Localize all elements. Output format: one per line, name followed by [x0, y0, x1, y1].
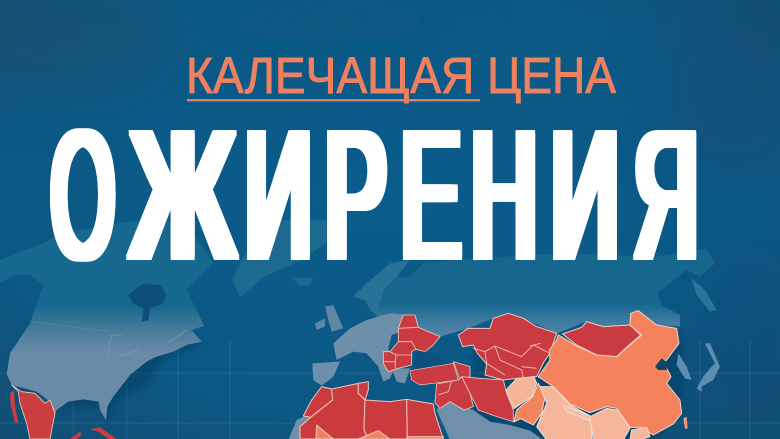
subtitle: КАЛЕЧАЩАЯ ЦЕНА: КАЛЕЧАЩАЯ ЦЕНА [186, 47, 616, 104]
turkey [410, 363, 458, 385]
title: ОЖИРЕНИЯ: Н [471, 92, 537, 297]
title: ОЖИРЕНИЯ: Я [634, 92, 698, 297]
land: greenland and iceland [232, 220, 337, 297]
countries: balkans, eastern europe and turkey [383, 313, 557, 422]
hudson bay [128, 283, 167, 322]
title: ОЖИРЕНИЯ: О [51, 92, 114, 297]
map graticule [0, 340, 780, 439]
title: ОЖИРЕНИЯ: Р [325, 92, 387, 297]
caucasus [453, 362, 470, 380]
great lakes [107, 330, 187, 357]
land: mexico and caribbean [10, 385, 117, 439]
land: arabia and west sahara [288, 368, 543, 439]
land: north america [0, 220, 213, 420]
land: russia and north asia [377, 248, 720, 392]
levant and iraq [435, 377, 473, 410]
us canada border [33, 322, 110, 332]
korea and japan [677, 343, 720, 392]
countries: mongolia [563, 322, 641, 357]
central asia [458, 313, 557, 380]
black sea [413, 352, 449, 368]
land: europe [312, 260, 410, 386]
countries: south asia [506, 377, 650, 439]
title: ОЖИРЕНИЯ: Ж [131, 92, 234, 297]
countries: china [538, 311, 688, 435]
title: ОЖИРЕНИЯ: И [551, 92, 619, 297]
subtitle underline [187, 99, 480, 101]
map shadows [10, 296, 683, 439]
title: ОЖИРЕНИЯ: И [245, 92, 312, 297]
countries: north africa and middle east [300, 382, 443, 439]
iran [462, 377, 513, 422]
far east land [692, 278, 717, 312]
title: ОЖИРЕНИЯ: Е [401, 92, 461, 297]
